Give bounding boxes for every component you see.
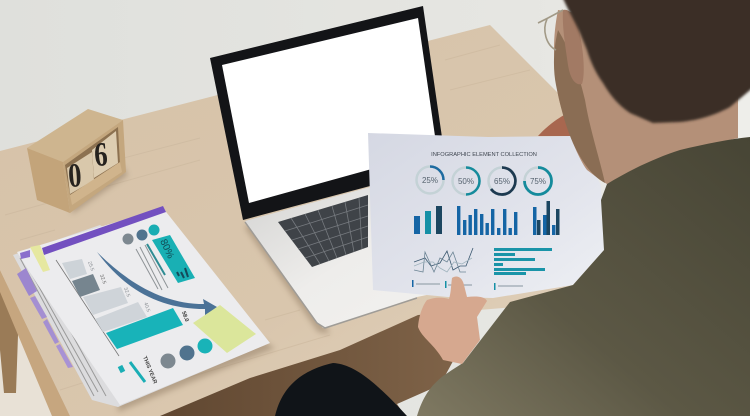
paper title: INFOGRAPHIC ELEMENT COLLECTION [431, 152, 537, 158]
stack of documents: 58.0 [180, 311, 189, 323]
horizontal bar chart [494, 248, 552, 275]
this year block: THIS YEAR [141, 356, 158, 385]
man: hair [562, 0, 750, 123]
desk top [0, 25, 600, 416]
purple tabs [17, 268, 73, 368]
document bar labels: 25.5 [86, 261, 95, 272]
floor and under-desk wood [0, 275, 470, 416]
man: ear [563, 10, 584, 84]
laptop screen [222, 18, 437, 203]
bar chart 1 [414, 206, 442, 234]
top sheet [17, 208, 270, 405]
laptop front edge [245, 222, 417, 328]
man: holding hand [418, 276, 487, 364]
calendar block: 6 [93, 135, 109, 174]
donut 75% [524, 168, 552, 194]
desk front edge [0, 270, 70, 416]
desk shadows [70, 165, 330, 412]
donut 75%: 75% [530, 177, 546, 186]
document bar chart [62, 259, 183, 349]
stack of documents: 40.5 [142, 302, 151, 313]
donut 65%: 65% [494, 177, 510, 186]
sticky note [193, 305, 256, 353]
dark trousers [275, 363, 407, 416]
lower sheets [13, 225, 265, 407]
top circles [122, 224, 160, 244]
laptop screen frame [210, 6, 446, 220]
small yellow note [30, 245, 50, 272]
donut 65% [488, 168, 516, 194]
teal stat card [152, 235, 195, 283]
axis line [56, 260, 119, 356]
keyboard [278, 195, 368, 267]
bar chart 3 [533, 201, 560, 235]
held infographic sheet [368, 133, 604, 298]
curved arrow [97, 252, 217, 316]
man: cheek shade [554, 30, 605, 183]
calendar digits: 0 [67, 156, 83, 195]
donut 25%: 25% [422, 176, 438, 185]
stack of documents: 32.5 [98, 274, 107, 285]
laptop [210, 6, 500, 328]
teal stat card: 80% [157, 238, 176, 261]
legend marks [412, 280, 523, 290]
donut 25% [416, 166, 444, 194]
text lines beside card [136, 245, 168, 290]
laptop base [245, 160, 500, 328]
man: head skin and neck [554, 10, 738, 184]
stack of documents: 32.5 [122, 287, 131, 298]
donut 50% [452, 168, 480, 194]
stack of documents [13, 206, 270, 407]
this year block [120, 356, 158, 385]
donut 50%: 50% [458, 177, 474, 186]
bottom circles [160, 338, 212, 368]
man's hand behind paper [538, 114, 572, 136]
man: glasses [538, 10, 563, 50]
purple strip [42, 206, 166, 255]
man: shirt [417, 137, 750, 416]
line chart [414, 248, 473, 272]
paper [368, 133, 604, 298]
desk wood grain [5, 45, 530, 395]
calendar block [27, 109, 126, 213]
bar chart 2 [457, 206, 517, 235]
